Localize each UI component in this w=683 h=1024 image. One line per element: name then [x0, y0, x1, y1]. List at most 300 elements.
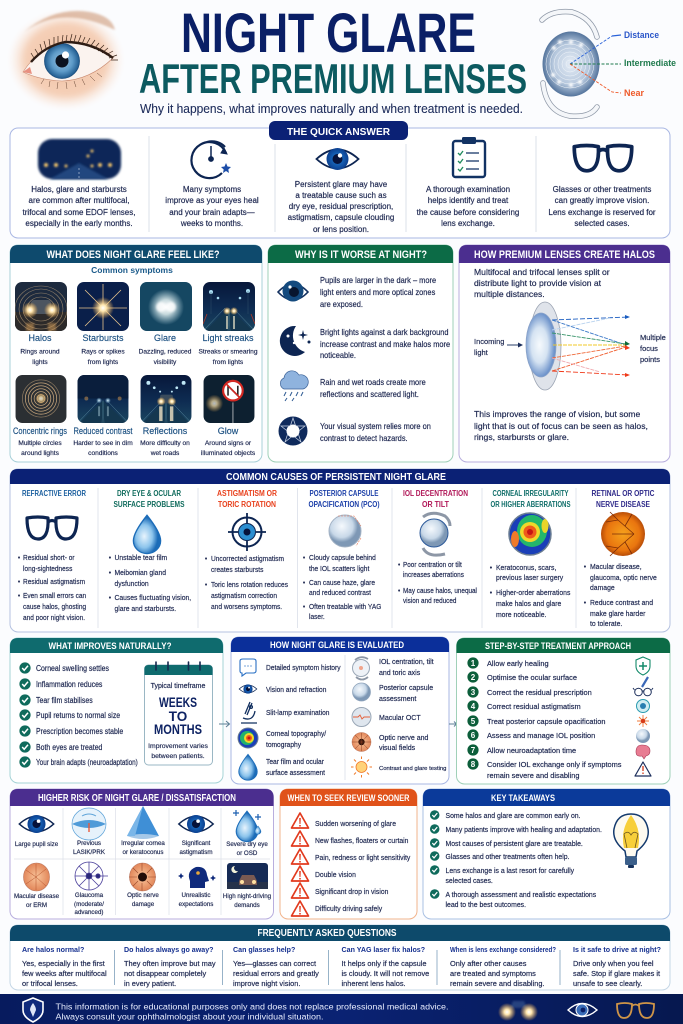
- heading: [10, 925, 670, 941]
- text: pupils: light enters and more optical zones: [320, 288, 435, 297]
- grid labels: Unrealistic: [182, 892, 210, 899]
- steps: Correct residual astigmatism: [487, 702, 581, 711]
- icon: eye: [568, 1004, 597, 1016]
- heading: WHAT DOES NIGHT GLARE FEEL LIKE?: [46, 249, 220, 261]
- icon: contrast ring: [278, 416, 308, 446]
- faq 2: Do halos always go away?: [124, 946, 214, 954]
- text: right column: Posterior capsule: [379, 685, 433, 692]
- column: astigmatism: Uncorrected astigmatism: [211, 555, 284, 563]
- column: corneal irregularity: previous laser surgery: [496, 573, 564, 582]
- panel: what improves naturally: [10, 638, 223, 783]
- symptom labels: wet roads: [150, 450, 180, 457]
- warning list: New flashes, floaters or curtain: [315, 837, 408, 845]
- faq 1: few weeks after multifocal: [22, 969, 107, 978]
- text: left column: tomography: [266, 742, 302, 749]
- column: corneal irregularity: Higher-order aberrations: [496, 588, 571, 597]
- icon: light bulb: [614, 814, 648, 868]
- text: persistent glare: [288, 180, 394, 234]
- text: glasses and treatments: selected cases.: [574, 219, 630, 228]
- panel: frequently asked questions: [10, 925, 670, 990]
- column: dry eye: DRY EYE & OCULAR: [117, 489, 181, 498]
- text: halos common: are common after multifocal,: [29, 196, 129, 205]
- text: rain: reflections and scattered light.: [320, 390, 419, 399]
- heading: WHAT IMPROVES NATURALLY?: [48, 641, 172, 652]
- disclaimer text: Always consult your ophthalmologist about your individual situation.: [56, 1012, 324, 1022]
- steps: 8: [471, 760, 476, 769]
- panel: how premium lenses create halos: [459, 245, 670, 462]
- column: corneal irregularity: OR HIGHER ABERRATIONS: [490, 500, 571, 509]
- grid labels: High night-driving: [223, 893, 272, 900]
- text: halos common: Halos, glare and starbursts: [31, 185, 127, 194]
- icon: car headlights: [498, 1001, 538, 1021]
- icons: right column: [351, 657, 372, 778]
- heading: [10, 245, 262, 263]
- column: refractive error: •: [18, 578, 21, 586]
- text: persistent glare: a treatable cause such as: [295, 191, 387, 200]
- text: glasses and treatments: [548, 185, 656, 228]
- text: pupils: [320, 276, 436, 309]
- faq 1: [22, 946, 107, 988]
- column: PCO: Can cause haze, glare: [309, 579, 375, 587]
- faq 6: [573, 946, 661, 988]
- text: left column: Tear film and ocular: [266, 759, 325, 766]
- text: left column: Vision and refraction: [266, 687, 326, 694]
- disclaimer text: This information is for educational purposes only and does not replace professional medical advice.: [56, 1002, 448, 1012]
- column: astigmatism: •: [205, 581, 208, 589]
- column: corneal irregularity: make halos and glare: [496, 599, 561, 608]
- diagram: light splitting through lens: [474, 302, 666, 390]
- faq 2: They often improve but may: [124, 959, 216, 968]
- faq 5: [450, 946, 556, 988]
- icon: rain cloud: [280, 371, 308, 401]
- faq 2: not disappear completely: [124, 969, 206, 978]
- text: intro: [474, 267, 610, 299]
- column: retinal disease: NERVE DISEASE: [596, 500, 651, 509]
- heading: COMMON CAUSES OF PERSISTENT NIGHT GLARE: [226, 471, 446, 483]
- faq 5: When is lens exchange considered?: [450, 946, 556, 954]
- column: dry eye: •: [109, 568, 112, 577]
- column: IOL decentration: increases aberrations: [403, 572, 464, 579]
- column: PCO: •: [303, 603, 306, 611]
- heading: HIGHER RISK OF NIGHT GLARE / DISSATISFACTION: [38, 793, 236, 804]
- text: visual system: contrast to detect hazards.: [320, 434, 408, 443]
- symptom labels: lights: [32, 359, 48, 366]
- faq 4: It helps only if the capsule: [342, 959, 427, 968]
- column: PCO: POSTERIOR CAPSULE: [310, 489, 379, 498]
- steps: 6: [471, 731, 476, 740]
- text: pupils: Pupils are larger in the dark – more: [320, 276, 436, 285]
- symptom labels: from lights: [213, 359, 244, 366]
- heading: [10, 789, 274, 806]
- symptom labels: illuminated objects: [201, 450, 256, 457]
- column: retinal disease: •: [584, 598, 587, 607]
- column: retinal disease: [584, 489, 657, 628]
- checklist: Tear film stabilises: [36, 696, 93, 705]
- illustration: premium intraocular lens with focus lines: Intermediate: [624, 58, 676, 68]
- symptom labels: from lights: [88, 359, 119, 366]
- text: right column: assessment: [379, 696, 416, 703]
- label: incoming light: light: [474, 348, 489, 357]
- calendar: typical timeframe: MONTHS: [154, 722, 202, 737]
- text: left column: Detailed symptom history: [266, 665, 341, 672]
- column: PCO: •: [303, 579, 306, 587]
- symptom labels: Harder to see in dim: [73, 440, 133, 447]
- symptom labels: Reflections: [143, 426, 188, 436]
- grid labels: (moderate/: [74, 901, 104, 908]
- heading: KEY TAKEAWAYS: [491, 793, 555, 804]
- text: persistent glare: Persistent glare may have: [295, 180, 388, 189]
- warning list: Difficulty driving safely: [315, 905, 383, 913]
- column: corneal irregularity: •: [490, 588, 493, 597]
- icon grid: [19, 806, 268, 891]
- grid labels: or keratoconus: [123, 849, 163, 856]
- grid labels: expectations: [179, 901, 213, 908]
- symptom labels: Streaks or smearing: [198, 348, 258, 356]
- faq 3: [233, 946, 319, 988]
- column: PCO: Cloudy capsule behind: [309, 554, 376, 562]
- column: retinal disease: Macular disease,: [590, 562, 642, 571]
- arrow: [449, 722, 456, 726]
- panel: the quick answer: [10, 121, 670, 238]
- column: refractive error: •: [18, 592, 21, 600]
- text: pupils: are exposed.: [320, 300, 363, 309]
- column: astigmatism: and worsens symptoms.: [211, 603, 282, 611]
- panel: step-by-step treatment approach: [456, 638, 670, 784]
- column: dry eye: Unstable tear film: [114, 553, 167, 562]
- symptom labels: Rings around: [20, 348, 60, 356]
- heading: [456, 638, 670, 653]
- arrow: [219, 721, 230, 727]
- faq 2: [124, 946, 216, 988]
- symptom labels: Starbursts: [82, 333, 124, 343]
- panel: higher risk: [10, 789, 274, 919]
- column: refractive error: •: [18, 554, 21, 562]
- text: persistent glare: or lens position.: [313, 225, 369, 234]
- column: corneal irregularity: [490, 489, 571, 619]
- checklist: Both eyes are treated: [36, 743, 102, 752]
- footer band: [0, 994, 683, 1024]
- column: dry eye: Causes fluctuating vision,: [114, 593, 191, 602]
- text: right column: Contrast and glare testing: [379, 766, 446, 772]
- icon: clipboard: [453, 137, 485, 177]
- steps: Consider IOL exchange only if symptoms: [487, 760, 622, 769]
- steps: 5: [471, 717, 476, 726]
- column: retinal disease: Reduce contrast and: [590, 598, 653, 607]
- subheading: Common symptoms: [91, 265, 173, 275]
- steps: Correct the residual prescription: [487, 688, 592, 697]
- column: corneal irregularity: more noticeable.: [496, 610, 546, 619]
- column: astigmatism: •: [205, 555, 208, 563]
- faq 5: are treated and symptoms: [450, 969, 536, 978]
- panel: why is it worse at night: [268, 245, 453, 462]
- column: refractive error: long-sightedness: [23, 565, 73, 573]
- faq 2: in every patient.: [124, 979, 176, 988]
- warning list: Significant drop in vision: [315, 888, 388, 896]
- panel: key takeaways: [423, 789, 670, 919]
- text: halos common: [23, 185, 135, 228]
- column: refractive error: Residual astigmatism: [23, 578, 85, 586]
- symptom labels: Reduced contrast: [74, 426, 133, 436]
- heading: [10, 638, 223, 653]
- symptom labels: Halos: [28, 333, 52, 343]
- column: PCO: OPACIFICATION (PCO): [308, 500, 380, 509]
- label: multiple focus points: focus: [640, 344, 658, 353]
- grid labels: LASIK/PRK: [73, 849, 106, 856]
- column: retinal disease: damage: [590, 583, 615, 592]
- column: PCO: Often treatable with YAG: [309, 603, 381, 611]
- symptom labels: Around signs or: [205, 440, 252, 447]
- column: dry eye: glare and starbursts.: [114, 604, 176, 613]
- text: bright lights: noticeable.: [320, 351, 356, 360]
- faq 3: Yes—glasses can correct: [233, 959, 316, 968]
- calendar: typical timeframe: WEEKS: [159, 695, 197, 710]
- steps: remain severe and disabling: [487, 771, 579, 780]
- symptom labels: Light streaks: [202, 333, 254, 343]
- grid labels: Irregular cornea: [121, 840, 165, 847]
- thumbnail: reflections: [140, 375, 192, 423]
- icon: glasses: [574, 146, 632, 171]
- faq 1: or trifocal lenses.: [22, 979, 78, 988]
- text: left column: Slit-lamp examination: [266, 710, 330, 717]
- text: out of focus: rings, starbursts or glare.: [474, 432, 569, 442]
- grid labels: Significant: [182, 840, 211, 847]
- text: left column: [266, 665, 341, 777]
- steps: Optimise the ocular surface: [487, 673, 577, 682]
- text: right column: [379, 659, 446, 772]
- symptom labels: around lights: [21, 450, 60, 457]
- panel: how night glare is evaluated: [231, 637, 449, 784]
- grid labels: damage: [132, 901, 155, 908]
- symptom labels: visibility: [154, 359, 177, 366]
- column: corneal irregularity: Keratoconus, scars,: [496, 563, 556, 572]
- column: astigmatism: TORIC ROTATION: [218, 500, 276, 509]
- text: glasses and treatments: can greatly improve vision.: [555, 196, 649, 205]
- steps: 2: [471, 673, 476, 682]
- panel: when to seek review sooner: [280, 789, 417, 919]
- checklist: Your brain adapts (neuroadaptation): [36, 758, 138, 767]
- symptom labels: More difficulty on: [140, 440, 190, 447]
- column: astigmatism: ASTIGMATISM OR: [217, 489, 277, 498]
- heading: [10, 469, 670, 484]
- faq 6: Drive only when you feel: [573, 959, 654, 968]
- text: glasses and treatments: Glasses or other treatments: [553, 185, 651, 194]
- text: persistent glare: dry eye, residual prescription,: [289, 202, 393, 211]
- text: bright lights: increase contrast and make halos more: [320, 340, 450, 349]
- illustration: premium intraocular lens with focus lines: [542, 12, 676, 116]
- text: thorough examination: helps identify and treat: [428, 196, 509, 205]
- checklist: Glasses and other treatments often help.: [445, 853, 569, 861]
- symptom labels: Glow: [218, 426, 239, 436]
- calendar: typical timeframe: Typical timeframe: [151, 683, 206, 690]
- text: out of focus: [474, 409, 648, 442]
- column: IOL decentration: Poor centration or tilt: [403, 562, 462, 569]
- thumbnail: glare: [140, 282, 192, 331]
- column: retinal disease: to tolerate.: [590, 619, 622, 628]
- text: thorough examination: lens exchange.: [441, 219, 495, 228]
- faq 4: [342, 946, 429, 988]
- column: refractive error: Even small errors can: [23, 592, 86, 600]
- checklist: lead to the best outcomes.: [445, 901, 526, 909]
- faq 4: Can YAG laser fix halos?: [342, 946, 425, 954]
- steps: [467, 657, 622, 780]
- symptom labels: Concentric rings: [13, 426, 67, 436]
- column: PCO: laser.: [309, 613, 325, 621]
- faq 1: Are halos normal?: [22, 946, 84, 954]
- text: glasses and treatments: Lens exchange is reserved for: [548, 208, 656, 217]
- column: IOL decentration: •: [398, 588, 401, 595]
- checklist: Most causes of persistent glare are treatable.: [445, 840, 583, 848]
- column: dry eye: Meibomian gland: [114, 568, 166, 577]
- label: multiple focus points: points: [640, 355, 660, 364]
- symptom labels: conditions: [88, 450, 119, 457]
- grid labels: or ERM: [26, 902, 47, 909]
- symptom labels: Multiple circles: [18, 440, 62, 447]
- warning list: Sudden worsening of glare: [315, 820, 396, 828]
- grid labels: Glaucoma: [75, 892, 104, 899]
- steps: Assess and manage IOL position: [487, 731, 595, 740]
- faq 4: is cloudy. It will not remove: [342, 969, 429, 978]
- heading: FREQUENTLY ASKED QUESTIONS: [258, 928, 397, 939]
- heading: STEP-BY-STEP TREATMENT APPROACH: [485, 641, 631, 652]
- grid labels: or OSD: [237, 850, 258, 857]
- label: multiple focus points: [640, 333, 666, 364]
- checklist: Prescription becomes stable: [36, 727, 123, 736]
- column: retinal disease: •: [584, 562, 587, 571]
- heading: [423, 789, 670, 806]
- text: thorough examination: A thorough examination: [426, 185, 510, 194]
- heading: the quick answer: [269, 121, 408, 140]
- checklist: Pupil returns to normal size: [36, 711, 120, 720]
- column: IOL decentration: OR TILT: [422, 500, 449, 509]
- heading: WHY IS IT WORSE AT NIGHT?: [295, 249, 427, 261]
- text: bright lights: [320, 328, 450, 360]
- calendar: typical timeframe: TO: [169, 709, 187, 724]
- column: retinal disease: glaucoma, optic nerve: [590, 573, 657, 582]
- column: IOL decentration: IOL DECENTRATION: [403, 489, 468, 498]
- heading: WHEN TO SEEK REVIEW SOONER: [288, 793, 410, 804]
- icons: left column: [238, 659, 258, 780]
- checklist: A thorough assessment and realistic expectations: [445, 891, 597, 899]
- calendar: typical timeframe: between patients.: [151, 753, 205, 760]
- column: dry eye: [109, 489, 191, 613]
- text: right column: visual fields: [379, 745, 416, 752]
- label: multiple focus points: Multiple: [640, 333, 666, 342]
- column: retinal disease: make glare harder: [590, 609, 646, 618]
- symptom labels: Glare: [154, 333, 176, 343]
- faq 3: residual errors and greatly: [233, 969, 319, 978]
- text: intro: Multifocal and trifocal lenses split or: [474, 267, 610, 277]
- thumbnail: reduced contrast: [78, 375, 128, 423]
- steps: 3: [471, 688, 476, 697]
- steps: Allow neuroadaptation time: [487, 746, 576, 755]
- column: refractive error: cause halos, ghosting: [23, 603, 86, 611]
- text: right column: and toric axis: [379, 670, 421, 677]
- grid labels: Optic nerve: [127, 892, 159, 899]
- text: out of focus: light that is out of focus can be seen as halos,: [474, 421, 648, 431]
- checklist: Corneal swelling settles: [36, 664, 109, 673]
- faq 6: Is it safe to drive at night?: [573, 946, 661, 954]
- faq 6: safe. Stop if glare makes it: [573, 969, 660, 978]
- column: refractive error: and poor night vision.: [23, 614, 85, 622]
- label: incoming light: Incoming: [474, 337, 504, 346]
- checklist: Many patients improve with healing and adaptation.: [445, 826, 602, 834]
- grid labels: Severe dry eye: [226, 841, 268, 848]
- text: many symptoms: weeks to months.: [180, 219, 243, 228]
- text: persistent glare: astigmatism, capsule clouding: [288, 213, 394, 222]
- title: [139, 1, 527, 102]
- column: PCO: [303, 489, 381, 621]
- faq 3: improve night vision.: [233, 979, 300, 988]
- checklist: [430, 810, 602, 909]
- heading: [459, 245, 670, 263]
- column: dry eye: •: [109, 553, 112, 562]
- thumbnail: glow: [204, 375, 254, 423]
- text: thorough examination: the cause before considering: [417, 208, 519, 217]
- heading: HOW NIGHT GLARE IS EVALUATED: [270, 640, 404, 651]
- icon: shield: [23, 998, 43, 1022]
- text: visual system: [320, 422, 431, 443]
- text: visual system: Your visual system relies more on: [320, 422, 431, 431]
- panel: common causes: [10, 469, 670, 632]
- text: bright lights: Bright lights against a dark background: [320, 328, 449, 337]
- label: incoming light: [474, 337, 504, 357]
- icon: clock: [191, 141, 231, 178]
- symptom labels: Rays or spikes: [81, 348, 125, 356]
- text: rain: [320, 378, 426, 399]
- thumbnail: halos: [15, 282, 67, 331]
- column: refractive error: REFRACTIVE ERROR: [22, 489, 86, 498]
- symptom labels: [13, 333, 258, 457]
- column: corneal irregularity: •: [490, 563, 493, 572]
- heading: [268, 245, 453, 263]
- grid labels: [14, 840, 272, 916]
- warning list: Pain, redness or light sensitivity: [315, 854, 411, 862]
- grid labels: demands: [234, 902, 260, 909]
- steps: 1: [471, 659, 476, 668]
- warning list: Double vision: [315, 871, 356, 879]
- text: many symptoms: Many symptoms: [183, 185, 241, 194]
- column: IOL decentration: May cause halos, unequal: [403, 588, 477, 595]
- subtitle: Why it happens, what improves naturally and when treatment is needed.: [140, 101, 523, 116]
- step icons: [633, 657, 653, 776]
- thumbnail: concentric rings: [16, 375, 66, 423]
- grid labels: advanced): [75, 909, 103, 916]
- warning list: [292, 813, 411, 916]
- illustration: human eye: [8, 10, 124, 110]
- text: intro: distribute light to provide vision at: [474, 278, 602, 288]
- column: dry eye: •: [109, 593, 112, 602]
- column: astigmatism: [205, 489, 288, 611]
- thumbnail: starbursts: [77, 282, 129, 331]
- faq 3: Can glasses help?: [233, 946, 295, 954]
- grid labels: astigmatism: [179, 849, 213, 856]
- column: dry eye: dysfunction: [114, 579, 149, 588]
- steps: Treat posterior capsule opacification: [487, 717, 605, 726]
- checklist: selected cases.: [445, 877, 493, 885]
- grid labels: Macular disease: [14, 893, 60, 900]
- thumbnail: light streaks: [203, 282, 255, 331]
- text: right column: Optic nerve and: [379, 735, 429, 742]
- column: PCO: the IOL scatters light: [309, 565, 369, 573]
- faq 4: inherent lens halos.: [342, 979, 406, 988]
- text: right column: Macular OCT: [379, 715, 421, 722]
- calendar: typical timeframe: [144, 662, 212, 765]
- column: PCO: •: [303, 554, 306, 562]
- column: IOL decentration: [398, 489, 477, 605]
- steps: 7: [471, 746, 476, 755]
- steps: Allow early healing: [487, 659, 549, 668]
- text: right column: IOL centration, tilt: [379, 659, 434, 666]
